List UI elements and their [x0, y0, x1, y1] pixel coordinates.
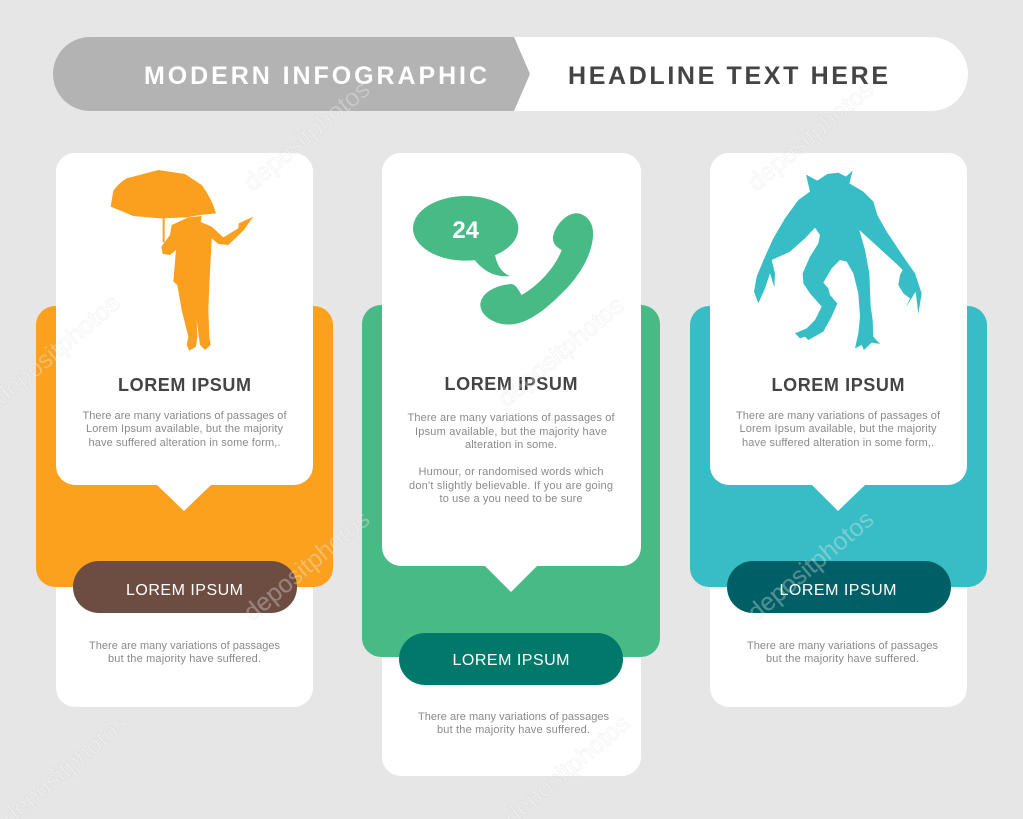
caption [747, 640, 938, 665]
text block: Ipsum available, but the majority have [415, 426, 607, 438]
pill label: LOREM IPSUM [780, 582, 896, 599]
icon: 24 hour phone [413, 196, 593, 325]
text block: Humour, or randomised words which [418, 466, 604, 478]
header banner [53, 37, 968, 111]
text block: There are many variations of passages of [82, 410, 287, 422]
text block: There are many variations of passages of [408, 412, 615, 424]
text block: alteration in some. [465, 439, 557, 451]
pill label [73, 561, 297, 613]
caption: but the majority have suffered. [437, 724, 590, 736]
watermark: depositphotos [238, 75, 375, 197]
watermark: depositphotos [742, 75, 879, 197]
panel: teal column [690, 153, 987, 707]
pill label [727, 561, 951, 613]
text block: to use a you need to be sure [440, 493, 582, 505]
caption: There are many variations of passages [418, 711, 610, 723]
caption [418, 711, 610, 736]
caption: but the majority have suffered. [766, 653, 919, 665]
pill label: LOREM IPSUM [126, 582, 243, 599]
watermark: depositphotos [742, 505, 879, 627]
panel: green column [362, 153, 660, 776]
header title left: MODERN INFOGRAPHIC [144, 62, 487, 90]
text block: Lorem Ipsum available, but the majority [740, 423, 937, 435]
icon: 24 hour phone: 24 [452, 217, 480, 244]
caption: There are many variations of passages [89, 640, 280, 652]
watermark: depositphotos [492, 291, 629, 413]
text block [736, 410, 941, 449]
pill label: LOREM IPSUM [452, 652, 570, 669]
text block [82, 410, 287, 449]
icon: man with umbrella [111, 170, 253, 351]
heading: LOREM IPSUM [118, 375, 251, 395]
heading: LOREM IPSUM [772, 375, 904, 395]
text block: have suffered alteration in some form,. [742, 437, 934, 449]
caption [89, 640, 280, 665]
text block: There are many variations of passages of [736, 410, 941, 422]
text block: don't slightly believable. If you are going [409, 480, 613, 492]
text block: have suffered alteration in some form,. [88, 437, 280, 449]
heading: LOREM IPSUM [444, 374, 578, 394]
watermark: depositphotos [238, 505, 375, 627]
header title right: HEADLINE TEXT HERE [568, 62, 888, 90]
pill label [399, 633, 623, 685]
icon: monster [754, 171, 922, 350]
caption: There are many variations of passages [747, 640, 938, 652]
caption: but the majority have suffered. [108, 653, 261, 665]
watermark [0, 75, 879, 819]
panel: orange column [36, 153, 333, 707]
text block: Lorem Ipsum available, but the majority [86, 423, 284, 435]
text block [408, 412, 615, 505]
